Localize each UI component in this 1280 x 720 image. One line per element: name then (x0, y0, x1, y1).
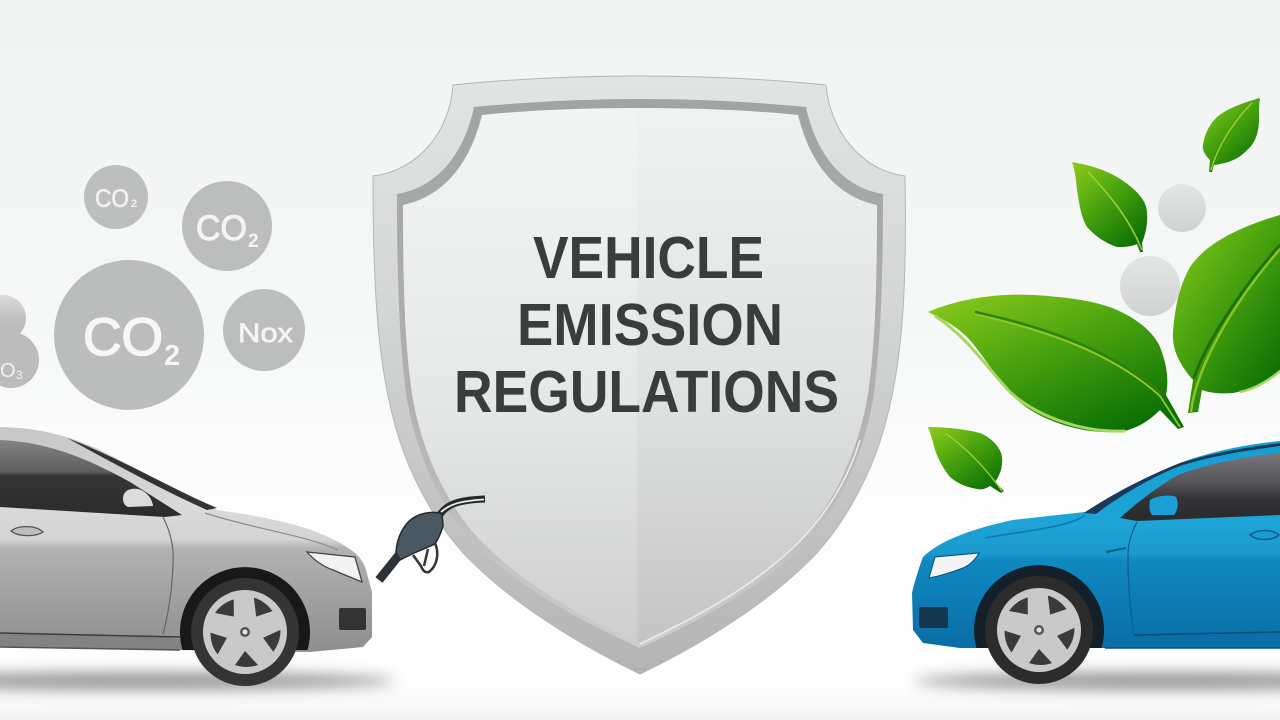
bubble: NOx (223, 289, 305, 371)
emission bubbles (0, 165, 305, 410)
blue car window (1120, 453, 1280, 521)
gray car body (0, 427, 372, 652)
blue car wheel arch (974, 565, 1104, 648)
bubble: CO2 small (84, 165, 148, 229)
shield face right (637, 108, 877, 643)
bubble: cloud at left edge: 3 (16, 368, 23, 382)
nozzle trigger guard (413, 543, 437, 572)
gray car headlight (307, 552, 362, 582)
bubble: cloud at left edge: O (0, 360, 16, 382)
blue car door handle (1250, 530, 1279, 540)
bubble: cloud at left edge (0, 295, 39, 388)
bubble: CO2 large: CO (83, 308, 163, 367)
ball: upper (1158, 184, 1206, 232)
blue car fog lamp (919, 607, 948, 628)
leaf: lower (928, 427, 1004, 493)
bubble: CO2 small: 2 (131, 198, 137, 210)
gray car window (0, 440, 182, 517)
gray car door handle (11, 527, 43, 536)
icon: fuel nozzle (379, 499, 485, 580)
gray car roof line (67, 438, 217, 510)
bubble: CO2 medium (182, 181, 272, 271)
leaf: large centre (928, 295, 1184, 432)
gray car wheel arch (180, 567, 310, 650)
blue car mirror (1149, 496, 1178, 515)
leaves (928, 98, 1280, 493)
bubble: CO2 large (54, 260, 204, 410)
gray car mirror (123, 489, 153, 507)
gray car wheel (191, 578, 299, 686)
shield outer band (373, 76, 905, 674)
title: REGULATIONS (454, 359, 839, 425)
leaf: medium upper (1072, 162, 1147, 252)
leaf: right edge (1173, 215, 1280, 413)
blue car door line and sill (1128, 522, 1137, 634)
bubble: NOx: Nox (238, 318, 294, 348)
bubble: CO2 medium: CO (196, 209, 247, 248)
bubble: CO2 large: 2 (164, 340, 180, 372)
title: VEHICLE (533, 225, 764, 291)
shield face left (403, 108, 637, 643)
blue car (912, 441, 1280, 684)
shield (373, 76, 905, 674)
bubble: CO2 medium: 2 (248, 231, 259, 252)
ball: lower (1120, 256, 1180, 316)
blue car wheel (985, 576, 1093, 684)
shield inner line (397, 99, 883, 648)
blue car body (912, 441, 1280, 648)
leaf: small top (1203, 98, 1260, 172)
shadow: gray car (0, 672, 395, 690)
title: EMISSION (517, 292, 783, 358)
gray car fog lamp (339, 608, 366, 630)
shadow: blue car (915, 672, 1280, 690)
title (454, 225, 839, 425)
blue car roof line (1084, 443, 1280, 514)
bubble: CO2 small: CO (95, 185, 129, 213)
gray car door line and sill (163, 517, 173, 634)
blue car headlight (929, 553, 979, 578)
gray car (0, 427, 372, 686)
